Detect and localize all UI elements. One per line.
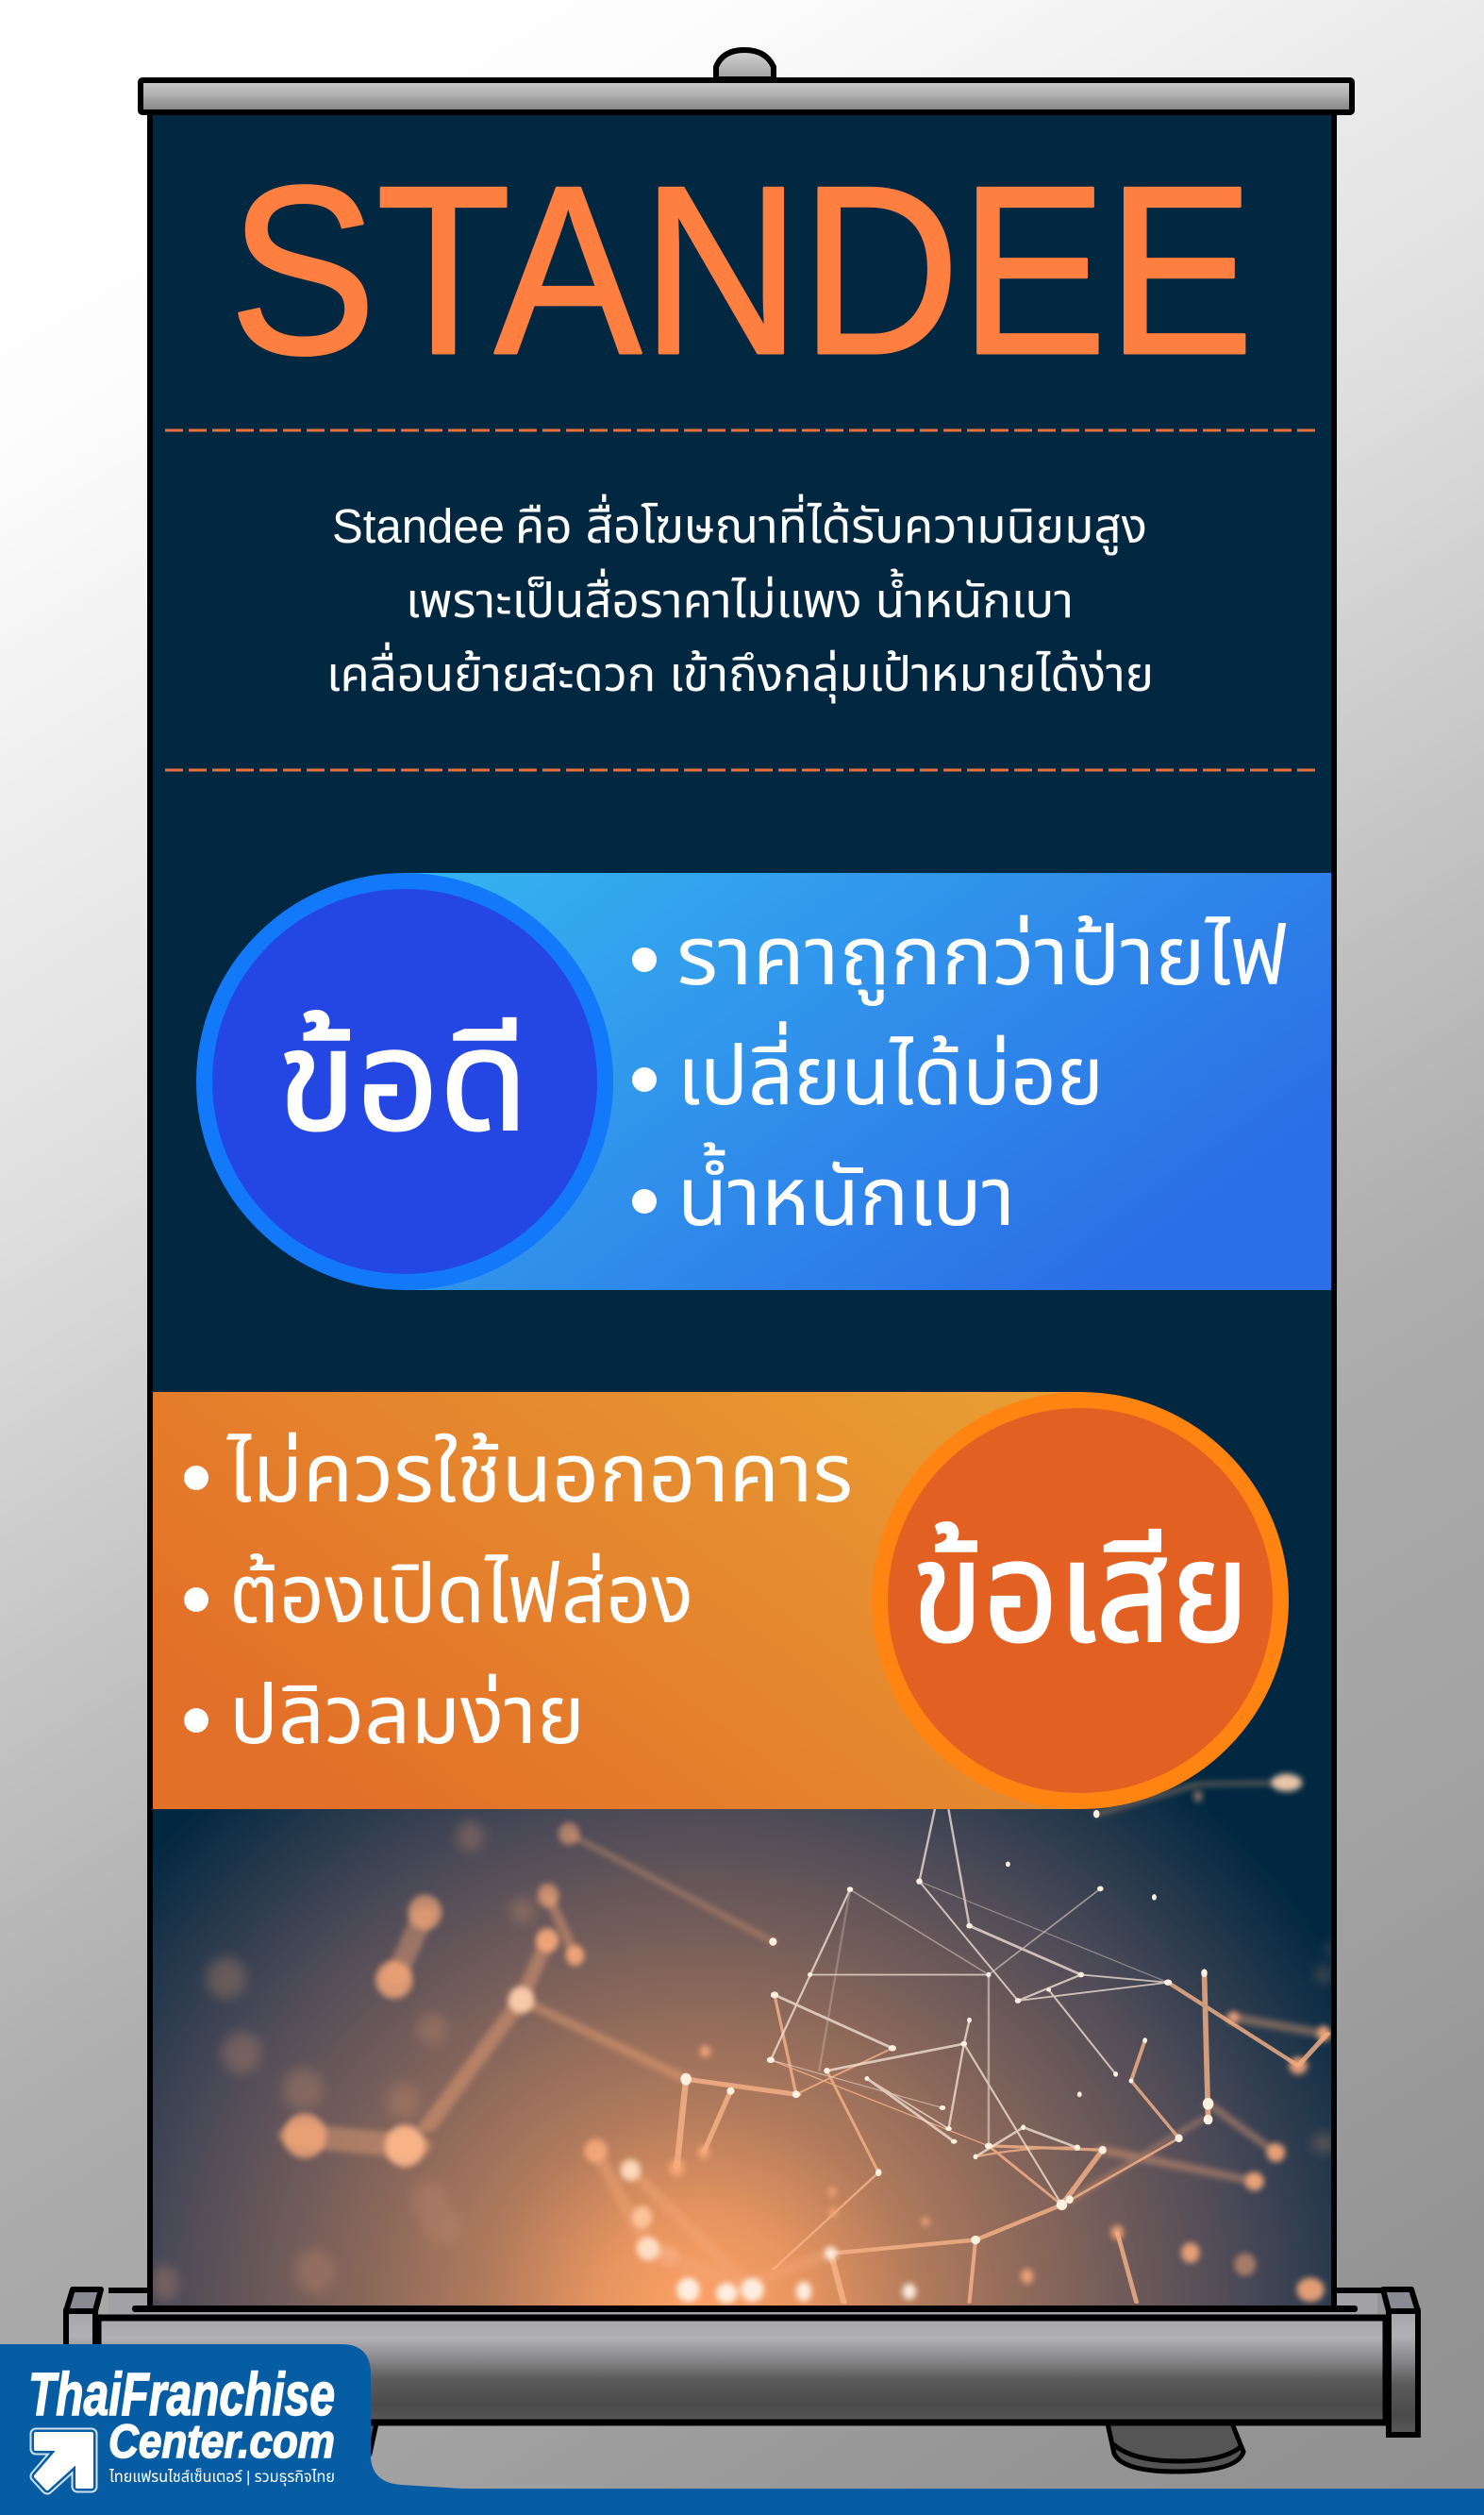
right end cap — [1383, 2289, 1418, 2435]
glow — [153, 1796, 1331, 2305]
disadvantages list: ไม่ควรใช้นอกอาคาร — [225, 1428, 853, 1519]
disadvantages list: ต้องเปิดไฟส่อง — [229, 1549, 693, 1640]
right foot — [1108, 2423, 1243, 2472]
intro text: เพราะเป็นสื่อราคาไม่แพง น้ำหนักเบา — [406, 568, 1074, 628]
panel: advantages — [204, 873, 1331, 1290]
orange band — [153, 1392, 1080, 1809]
dashed divider top — [165, 428, 1321, 432]
orange links — [676, 1973, 1327, 2303]
intro text: เคลื่อนย้ายสะดวก เข้าถึงกลุ่มเป้าหมายได้ง่าย — [326, 642, 1154, 704]
blue band — [404, 873, 1331, 1290]
network graphic — [151, 1774, 1336, 2304]
dashed divider bottom — [165, 768, 1321, 772]
bright bokeh dots — [283, 1774, 1330, 2302]
disadvantages list — [184, 1428, 853, 1761]
logo backing — [0, 2344, 1484, 2515]
disadvantages circle — [879, 1400, 1281, 1801]
dim bokeh dots — [151, 1821, 1336, 2302]
logo arrow icon — [36, 2434, 92, 2489]
advantages circle — [204, 881, 606, 1282]
panel: disadvantages — [153, 1392, 1281, 1809]
logo tagline: ไทยแฟรนไชส์เซ็นเตอร์ | รวมธุรกิจไทย — [108, 2468, 335, 2487]
top bar — [141, 80, 1352, 112]
advantages list — [632, 911, 1288, 1243]
intro text — [326, 494, 1154, 704]
intro text: Standee — [332, 499, 505, 553]
roller tube — [98, 2318, 1386, 2423]
advantages heading: ข้อดี — [277, 1001, 528, 1160]
intro text: คือ สื่อโฆษณาที่ได้รับความนิยมสูง — [515, 494, 1147, 556]
advantages list: น้ำหนักเบา — [677, 1142, 1015, 1243]
advantages list: ราคาถูกกว่าป้ายไฟ — [676, 911, 1288, 1006]
logo wordmark line 2: Center.com — [108, 2415, 335, 2468]
network background image — [153, 1769, 1331, 2305]
logo: ThaiFranchise Center — [0, 2344, 1484, 2515]
left end cap — [66, 2289, 101, 2435]
soft thick links — [305, 1783, 1324, 2289]
banner bottom rail — [132, 2305, 1358, 2312]
advantages list: เปลี่ยนได้บ่อย — [677, 1021, 1104, 1122]
disadvantages list: ปลิวลมง่าย — [229, 1669, 585, 1761]
banner panel — [150, 111, 1334, 2308]
white thin links — [771, 1809, 1168, 2205]
left foot — [241, 2423, 376, 2472]
top hanging knob — [716, 50, 774, 79]
title: STANDEE — [229, 136, 1254, 404]
disadvantages heading: ข้อเสีย — [911, 1513, 1249, 1671]
support connectors — [108, 2288, 1382, 2317]
small sharp nodes — [680, 1810, 1213, 2244]
white hot nodes — [676, 2247, 916, 2304]
roller base hardware — [66, 2288, 1418, 2472]
logo wordmark line 1: ThaiFranchise — [28, 2360, 335, 2428]
